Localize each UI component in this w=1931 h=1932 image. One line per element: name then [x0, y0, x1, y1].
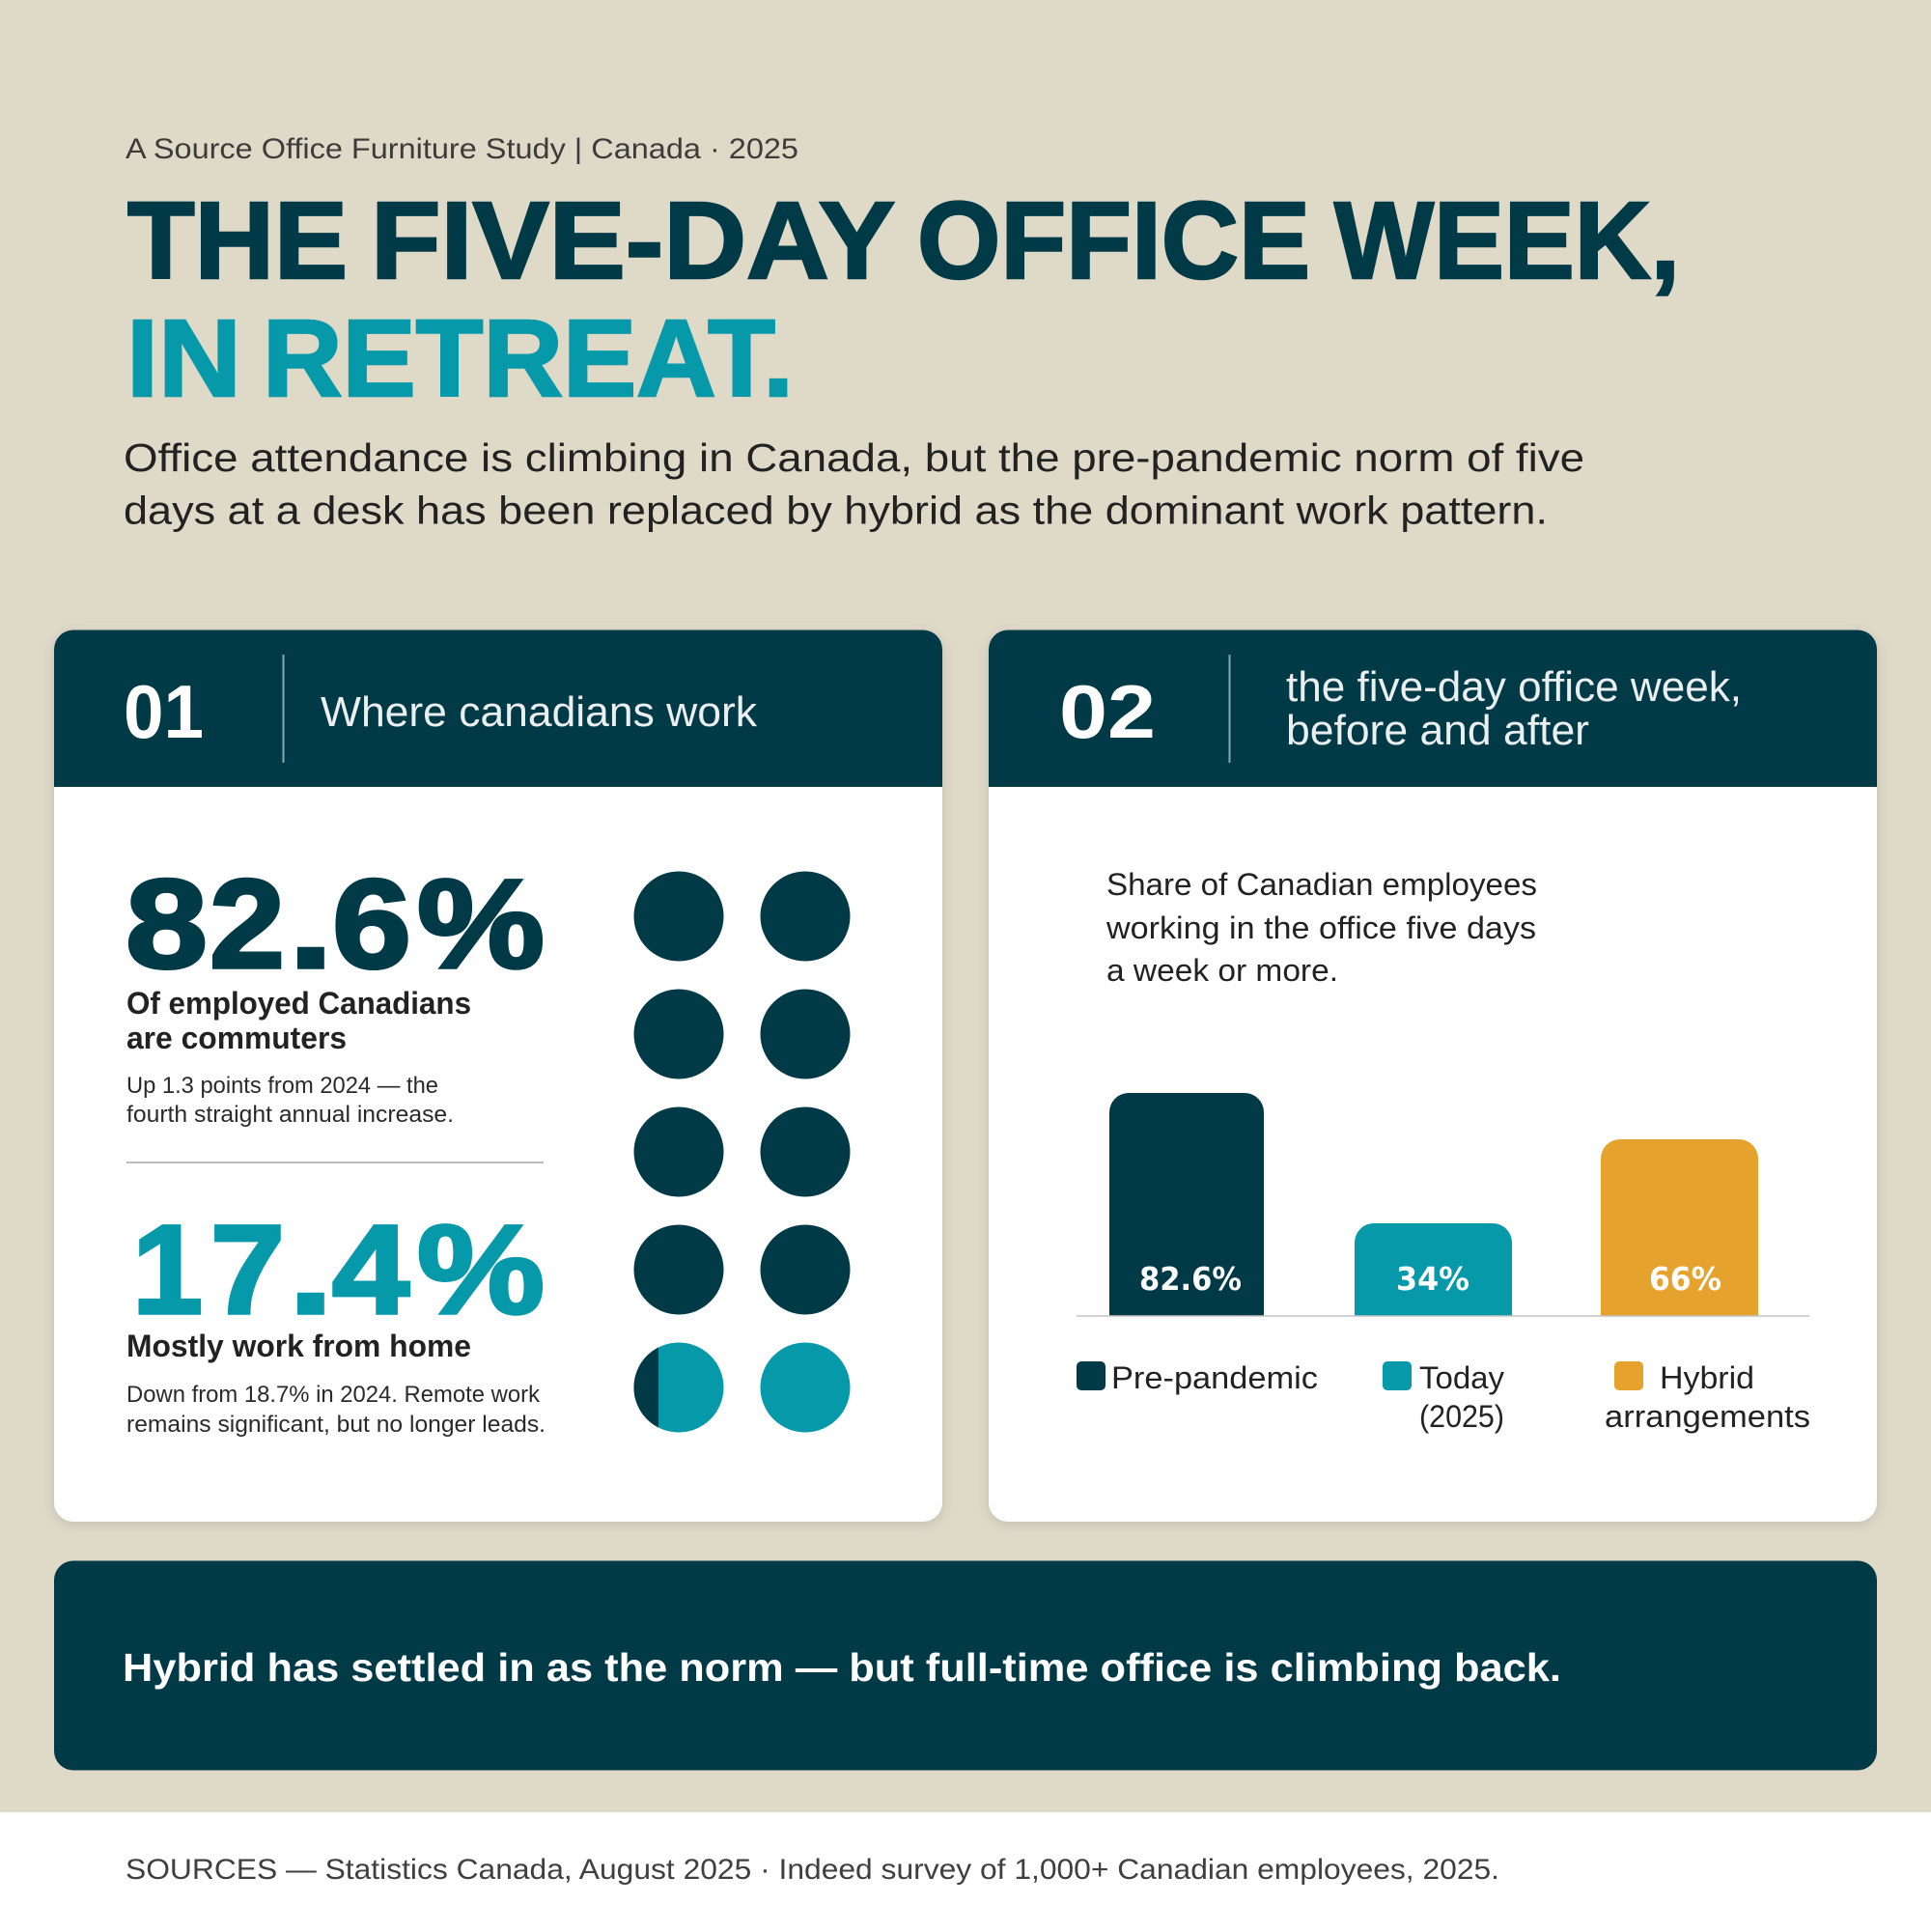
stat: 82.6%: . — [289, 853, 333, 994]
intro text — [124, 435, 1584, 533]
panel 1 heading: Where canadians work — [321, 688, 758, 736]
panel: where Canadians work — [54, 630, 942, 1522]
stat: 82.6%: Of employed Canadians — [126, 986, 471, 1021]
bar: today: 34% — [1396, 1260, 1469, 1298]
bar: pre-pandemic: 82.6% — [1139, 1260, 1242, 1298]
intro text: days at a desk has been replaced by hybrid as the dominant work pattern. — [124, 489, 1548, 533]
panel: five-day office week before and after — [989, 630, 1877, 1522]
chart description — [1105, 867, 1537, 988]
legend: hybrid: Hybrid — [1660, 1360, 1754, 1395]
stat: 17.4%: 4 — [332, 1198, 409, 1340]
stat: 17.4%: % — [417, 1198, 545, 1340]
panel 1 number: 01 — [124, 669, 204, 754]
panel 1 background — [54, 630, 942, 1522]
legend: today — [1383, 1360, 1504, 1434]
title line 1: THE — [127, 180, 348, 301]
stat: 17.4%: 1 — [132, 1198, 203, 1340]
stat: 17.4%: remains significant, but no longer leads. — [126, 1412, 546, 1438]
panel 2 header bar — [989, 630, 1877, 787]
legend: today: Today — [1419, 1360, 1504, 1395]
legend: hybrid — [1605, 1360, 1810, 1434]
panel 2 heading — [1286, 663, 1742, 754]
stat: 17.4%: Mostly work from home — [126, 1329, 471, 1363]
legend: pre-pandemic: Pre-pandemic — [1111, 1360, 1318, 1395]
callout banner — [54, 1560, 1877, 1771]
stat: 17.4%: . — [289, 1198, 333, 1340]
title line 2: RETREAT. — [263, 297, 794, 419]
chart description: working in the office five days — [1105, 910, 1536, 945]
title line 1: WEEK, — [1334, 180, 1680, 301]
stat: 82.6%: 2 — [210, 853, 285, 994]
panel 2 background — [989, 630, 1877, 1522]
header block — [124, 133, 1680, 533]
panel 1 header bar — [54, 630, 942, 787]
callout banner: Hybrid has settled in as the norm — but full-time office is climbing back. — [123, 1645, 1561, 1690]
stat: 82.6%: 6 — [332, 853, 411, 994]
stat: 82.6%: 8 — [126, 853, 208, 994]
title line 1: OFFICE — [917, 180, 1310, 301]
title line 2: IN — [126, 297, 241, 419]
dot matrix: 10 people — [633, 871, 850, 1433]
chart description: Share of Canadian employees — [1106, 867, 1537, 902]
stat: 17.4% — [126, 1198, 546, 1438]
panel 2 heading: before and after — [1286, 707, 1589, 754]
footer: sources: SOURCES — Statistics Canada, August 2025 · Indeed survey of 1,000+ Canadian employees, 2025. — [126, 1854, 1499, 1886]
bar: hybrid — [1601, 1139, 1758, 1316]
eyebrow: A Source Office Furniture Study | Canada · 2025 — [126, 133, 798, 165]
title line 1: FIVE-DAY — [371, 180, 895, 301]
stat: 82.6%: Up 1.3 points from 2024 — the — [126, 1073, 438, 1099]
legend — [1077, 1360, 1810, 1434]
bar chart — [1077, 1093, 1809, 1316]
bar: pre-pandemic — [1109, 1093, 1264, 1316]
title line 1 — [127, 180, 1680, 301]
stat: 82.6%: % — [417, 853, 545, 994]
legend: hybrid: arrangements — [1605, 1399, 1810, 1434]
panel 2 heading: the five-day office week, — [1286, 663, 1742, 711]
intro text: Office attendance is climbing in Canada, but the pre-pandemic norm of five — [124, 435, 1584, 480]
stat: 82.6%: fourth straight annual increase. — [126, 1102, 454, 1128]
bar: hybrid: 66% — [1649, 1260, 1721, 1298]
panel 2 number: 02 — [1059, 669, 1156, 754]
footer: sources — [0, 1812, 1931, 1932]
stat: 17.4%: Down from 18.7% in 2024. Remote work — [126, 1382, 541, 1408]
stat: 82.6%: are commuters — [126, 1021, 347, 1055]
bar: today — [1355, 1223, 1512, 1316]
legend: today: (2025) — [1419, 1399, 1504, 1434]
stat: 82.6% — [126, 853, 545, 1128]
stat: 17.4%: 7 — [210, 1198, 285, 1340]
chart description: a week or more. — [1106, 953, 1338, 988]
